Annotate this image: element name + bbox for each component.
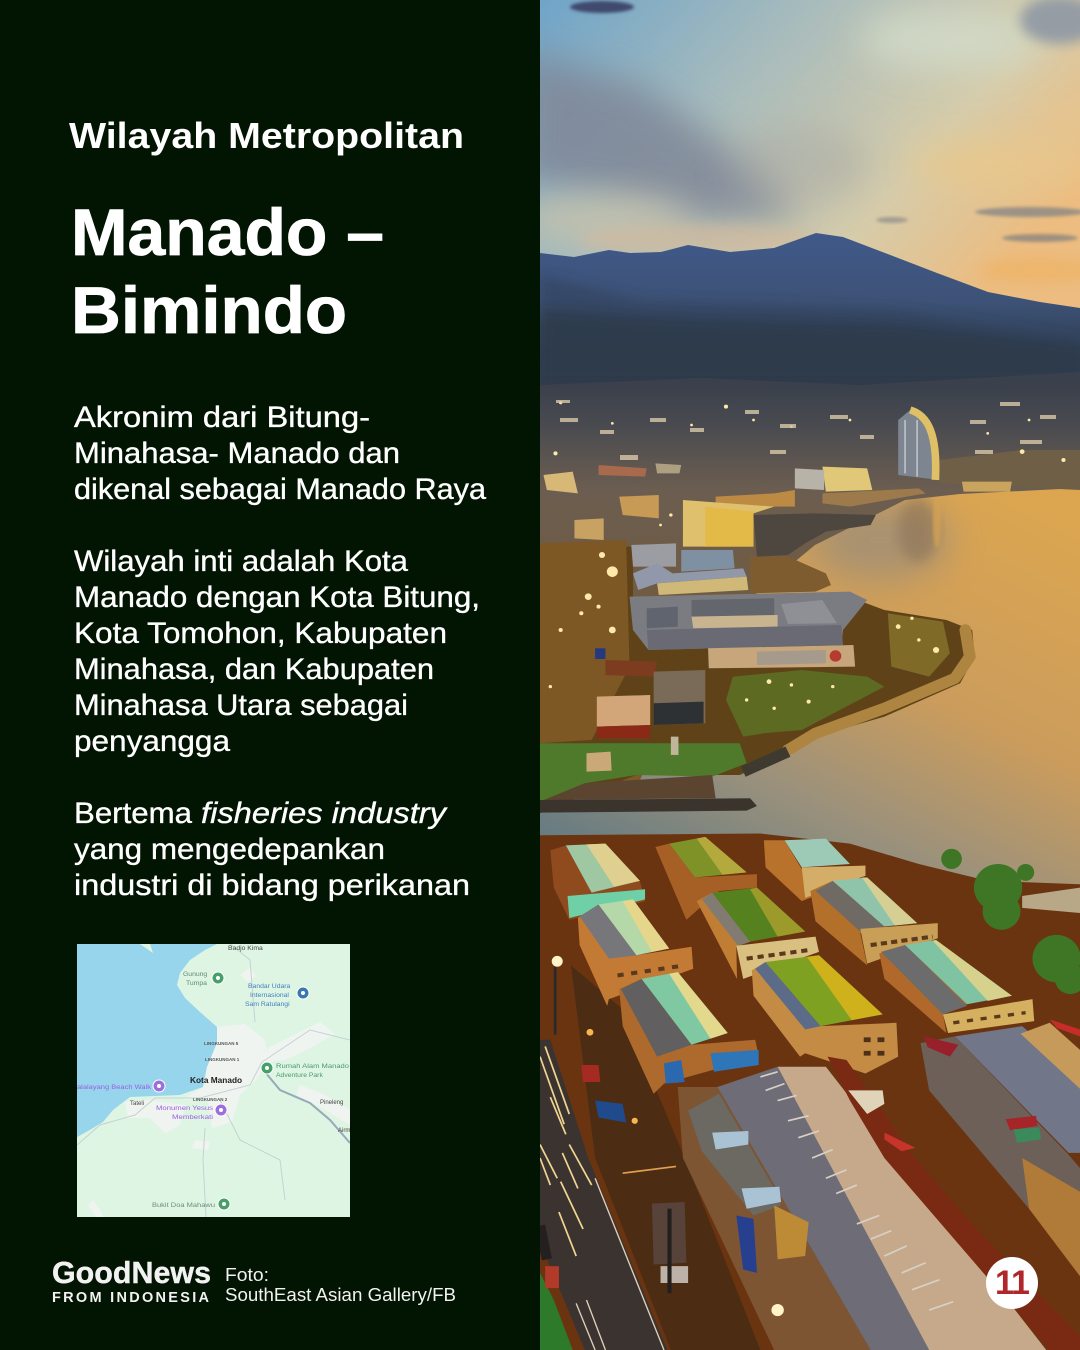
text block: acronym: dikenal sebagai Manado Raya [74,473,487,506]
block B [655,837,757,920]
shoreline buildings [543,450,1080,540]
map: labels: Bukit Doa Mahawu [152,1202,215,1209]
map: place pins [153,972,309,1210]
heading: Wilayah Metropolitan: Wilayah Metropolitan [69,115,464,156]
map: labels: Badjo Kima [228,945,263,952]
shore trees [941,849,1080,994]
map: labels: LINGKUNGAN 2 [193,1097,228,1102]
map: labels: LINGKUNGAN 5 [204,1041,239,1046]
map: labels: Airm [338,1128,350,1134]
panel: text column [52,115,487,1306]
waterfront district [540,401,1080,813]
text block: acronym: Minahasa- Manado dan [74,437,400,470]
red frontage strip [828,1057,1080,1350]
block H [752,955,898,1074]
map: labels [77,945,350,1209]
map: labels: LINGKUNGAN 1 [205,1057,240,1062]
title: Manado – Bimindo: Bimindo [71,273,347,347]
market blocks district [540,834,1080,1350]
map: labels: Internasional [250,992,289,999]
map: labels: Sam Ratulangi [245,1001,290,1008]
block A [550,844,645,920]
hillside light specks [556,400,1056,460]
ground: dark lots [571,965,760,1350]
map: motorway [265,1072,350,1143]
hillside city and left land [540,372,1080,790]
block J with long roof [678,1067,1046,1350]
lower slopes [540,275,1080,400]
block C [764,839,865,901]
logo: GoodNews from Indonesia [52,1255,211,1306]
tower [898,410,940,480]
bay water [540,480,1080,900]
gray mall roofs [595,543,867,668]
peninsula land [540,547,975,813]
text block: fisheries theme: Bertema [74,797,193,830]
mountain [540,233,1080,430]
block E [697,888,819,979]
street lights [549,401,1066,710]
title: Manado – Bimindo [71,195,384,347]
rock seawall [788,630,970,750]
sky [510,0,1080,330]
beach [540,775,716,802]
map: labels: Tumpa [186,980,207,987]
block I [619,972,759,1094]
map: urban areas [88,968,350,1217]
map: labels: alalayang Beach Walk [77,1084,152,1091]
park [726,613,950,737]
map: labels: Monumen Yesus [156,1105,214,1112]
shops south of mall [597,660,705,738]
photo credit [225,1264,456,1305]
text block: core area [74,545,480,758]
text block: fisheries theme: fisheries industry [201,797,448,830]
logo: GoodNews from Indonesia: FROM INDONESIA [52,1290,210,1306]
breakwater [540,798,757,813]
ground [540,834,1080,1350]
map: labels: Memberkati [172,1114,214,1121]
photo: aerial view of Manado waterfront [540,0,1080,1350]
map: roads [77,944,350,1217]
map: labels: Bandar Udara [248,983,291,990]
text block: fisheries theme: yang mengedepankan [74,833,385,866]
green lawn [540,737,747,802]
text block: core area: Manado dengan Kota Bitung, [74,581,480,614]
yellow hotel [683,500,774,547]
road [540,1040,667,1350]
map: labels: Rumah Alam Manado [276,1063,349,1070]
block F [578,899,693,1006]
map: labels: Kota Manado [190,1075,242,1085]
map of Kota Manado [77,944,350,1217]
block G [879,940,1034,1033]
jetty [1022,888,1080,913]
title: Manado – Bimindo: Manado – [71,195,384,269]
page number badge: 11 [995,1264,1029,1302]
photo credit: Foto: [225,1264,269,1285]
text block: acronym [74,401,487,506]
map: sea [77,944,217,1137]
dark shore [754,513,876,557]
photo credit: SouthEast Asian Gallery/FB [225,1284,456,1305]
text block: core area: Kota Tomohon, Kabupaten [74,617,447,650]
upper spit [750,557,831,593]
page number badge [986,1257,1038,1309]
block D [810,877,938,965]
map: labels: Gunung [183,971,207,978]
text block: acronym: Akronim dari Bitung- [74,401,370,434]
map: labels: Pineleng [320,1100,343,1106]
block K [921,1019,1080,1276]
text block: fisheries theme [74,797,470,902]
map: labels: Tateli [130,1101,144,1107]
text block: core area: Minahasa, dan Kabupaten [74,653,434,686]
text block: core area: Minahasa Utara sebagai [74,689,408,722]
text block: core area: penyangga [74,725,231,758]
text block: fisheries theme: industri di bidang perikanan [74,869,470,902]
parked vans and road features [552,956,688,1293]
text block: core area: Wilayah inti adalah Kota [74,545,409,578]
map: labels: Adventure Park [276,1072,323,1079]
left mixed lights [540,540,630,743]
logo: GoodNews from Indonesia: GoodNews [52,1255,211,1290]
